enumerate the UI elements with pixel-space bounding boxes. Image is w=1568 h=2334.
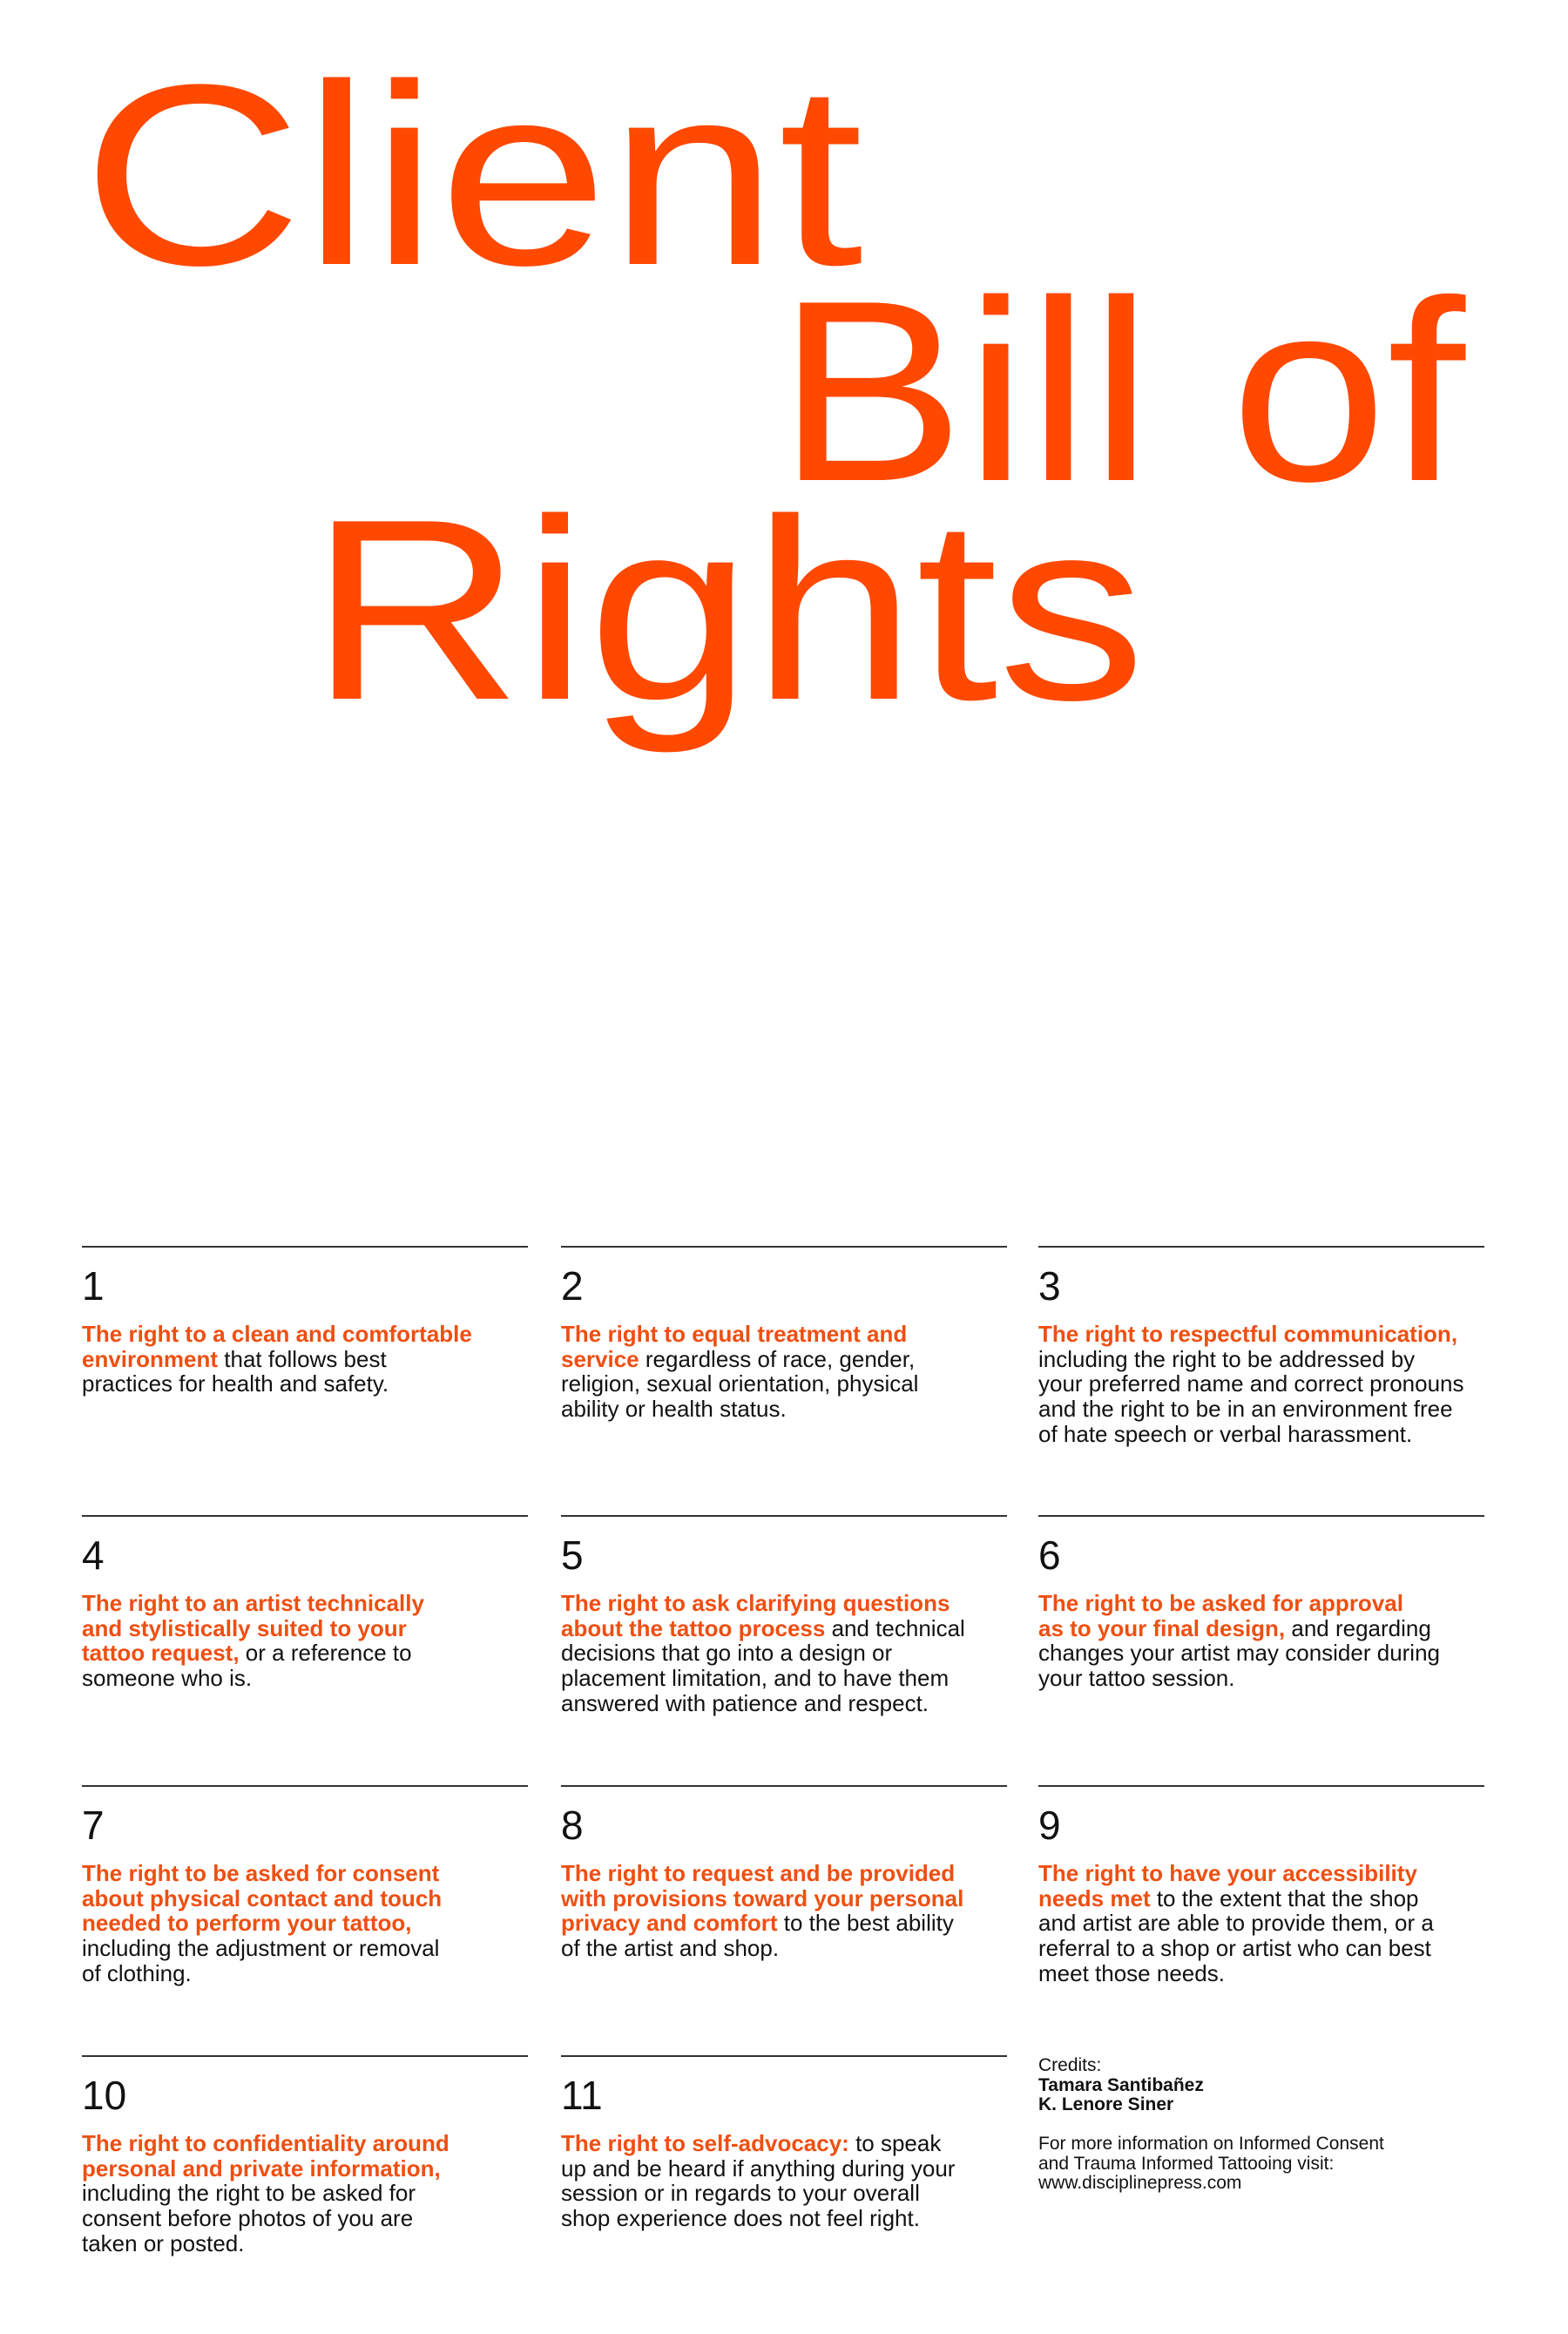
- number 11: 11: [561, 2073, 603, 2118]
- text 5: answered with patience and respect.: [561, 1690, 929, 1716]
- text 9: needs met to the extent that the shop: [1038, 1885, 1418, 1911]
- text 6: your tattoo session.: [1038, 1665, 1234, 1691]
- number 8: 8: [561, 1803, 584, 1848]
- text 11: The right to self-advocacy: to speak: [561, 2130, 941, 2156]
- item 4: [82, 1532, 424, 1691]
- credits: Credits:: [1038, 2055, 1101, 2075]
- text 10: personal and private information,: [82, 2155, 441, 2182]
- item 8: [561, 1803, 963, 1961]
- text 3: including the right to be addressed by: [1038, 1346, 1415, 1372]
- item 11: [561, 2073, 955, 2231]
- text 11: session or in regards to your overall: [561, 2180, 920, 2206]
- text 3: your preferred name and correct pronouns: [1038, 1370, 1463, 1397]
- number 2: 2: [561, 1263, 584, 1309]
- text 9: [1038, 1860, 1434, 1986]
- text 8: with provisions toward your personal: [561, 1885, 963, 1911]
- text 3: and the right to be in an environment free: [1038, 1396, 1453, 1422]
- number 3: 3: [1038, 1263, 1061, 1309]
- number 9: 9: [1038, 1803, 1061, 1848]
- item 6: [1038, 1532, 1440, 1691]
- text 1: environment that follows best: [82, 1346, 387, 1372]
- text 3: The right to respectful communication,: [1038, 1321, 1457, 1347]
- text 10: taken or posted.: [82, 2230, 244, 2256]
- credits: [1038, 2055, 1384, 2193]
- text 2: [561, 1321, 918, 1422]
- text 11: shop experience does not feel right.: [561, 2205, 920, 2231]
- item 7: [82, 1803, 442, 1986]
- text 4: someone who is.: [82, 1665, 252, 1691]
- text 7: of clothing.: [82, 1960, 192, 1986]
- text 8: of the artist and shop.: [561, 1935, 779, 1961]
- title: Rights: [309, 465, 1146, 755]
- text 10: [82, 2130, 449, 2256]
- text 9: meet those needs.: [1038, 1960, 1225, 1986]
- text 10: including the right to be asked for: [82, 2180, 416, 2206]
- text 7: [82, 1860, 442, 1986]
- text 5: about the tattoo process and technical: [561, 1615, 965, 1641]
- text 9: referral to a shop or artist who can best: [1038, 1935, 1431, 1961]
- text 5: [561, 1590, 965, 1716]
- text 7: needed to perform your tattoo,: [82, 1910, 411, 1936]
- text 6: The right to be asked for approval: [1038, 1590, 1403, 1616]
- credits: Tamara Santibañez: [1038, 2075, 1204, 2094]
- credits: www.disciplinepress.com: [1038, 2173, 1241, 2193]
- number 4: 4: [82, 1532, 105, 1578]
- number 1: 1: [82, 1263, 105, 1309]
- text 6: [1038, 1590, 1440, 1691]
- text 10: consent before photos of you are: [82, 2205, 413, 2231]
- text 1: [82, 1321, 472, 1397]
- text 6: changes your artist may consider during: [1038, 1640, 1440, 1666]
- text 3: [1038, 1321, 1463, 1447]
- text 4: and stylistically suited to your: [82, 1615, 407, 1641]
- text 9: and artist are able to provide them, or a: [1038, 1910, 1434, 1936]
- text 4: tattoo request, or a reference to: [82, 1640, 412, 1666]
- item 3: [1038, 1263, 1463, 1447]
- text 2: The right to equal treatment and: [561, 1321, 907, 1347]
- text 5: The right to ask clarifying questions: [561, 1590, 950, 1616]
- text 8: privacy and comfort to the best ability: [561, 1910, 954, 1936]
- item 2: [561, 1263, 918, 1422]
- title: Client: [82, 30, 864, 319]
- text 5: placement limitation, and to have them: [561, 1665, 949, 1691]
- text 7: about physical contact and touch: [82, 1885, 442, 1911]
- credits: and Trauma Informed Tattooing visit:: [1038, 2154, 1334, 2173]
- text 2: service regardless of race, gender,: [561, 1346, 915, 1372]
- text 9: The right to have your accessibility: [1038, 1860, 1417, 1886]
- text 6: as to your final design, and regarding: [1038, 1615, 1431, 1641]
- item 10: [82, 2073, 449, 2256]
- text 1: The right to a clean and comfortable: [82, 1321, 472, 1347]
- text 4: The right to an artist technically: [82, 1590, 424, 1616]
- number 7: 7: [82, 1803, 105, 1848]
- item 5: [561, 1532, 965, 1716]
- item 9: [1038, 1803, 1434, 1986]
- text 11: [561, 2130, 955, 2231]
- item 1: [82, 1263, 472, 1397]
- number 5: 5: [561, 1532, 584, 1578]
- title: [82, 30, 1466, 755]
- text 11: up and be heard if anything during your: [561, 2155, 955, 2182]
- number 10: 10: [82, 2073, 126, 2118]
- title: Bill of: [777, 247, 1466, 535]
- text 8: The right to request and be provided: [561, 1860, 955, 1886]
- text 7: including the adjustment or removal: [82, 1935, 439, 1961]
- credits: K. Lenore Siner: [1038, 2094, 1173, 2114]
- text 3: of hate speech or verbal harassment.: [1038, 1421, 1412, 1447]
- credits: For more information on Informed Consent: [1038, 2134, 1384, 2154]
- text 7: The right to be asked for consent: [82, 1860, 439, 1886]
- number 6: 6: [1038, 1532, 1061, 1578]
- text 8: [561, 1860, 963, 1961]
- text 1: practices for health and safety.: [82, 1370, 389, 1397]
- text 10: The right to confidentiality around: [82, 2130, 449, 2156]
- text 2: ability or health status.: [561, 1396, 787, 1422]
- text 4: [82, 1590, 424, 1691]
- text 2: religion, sexual orientation, physical: [561, 1370, 918, 1397]
- text 5: decisions that go into a design or: [561, 1640, 892, 1666]
